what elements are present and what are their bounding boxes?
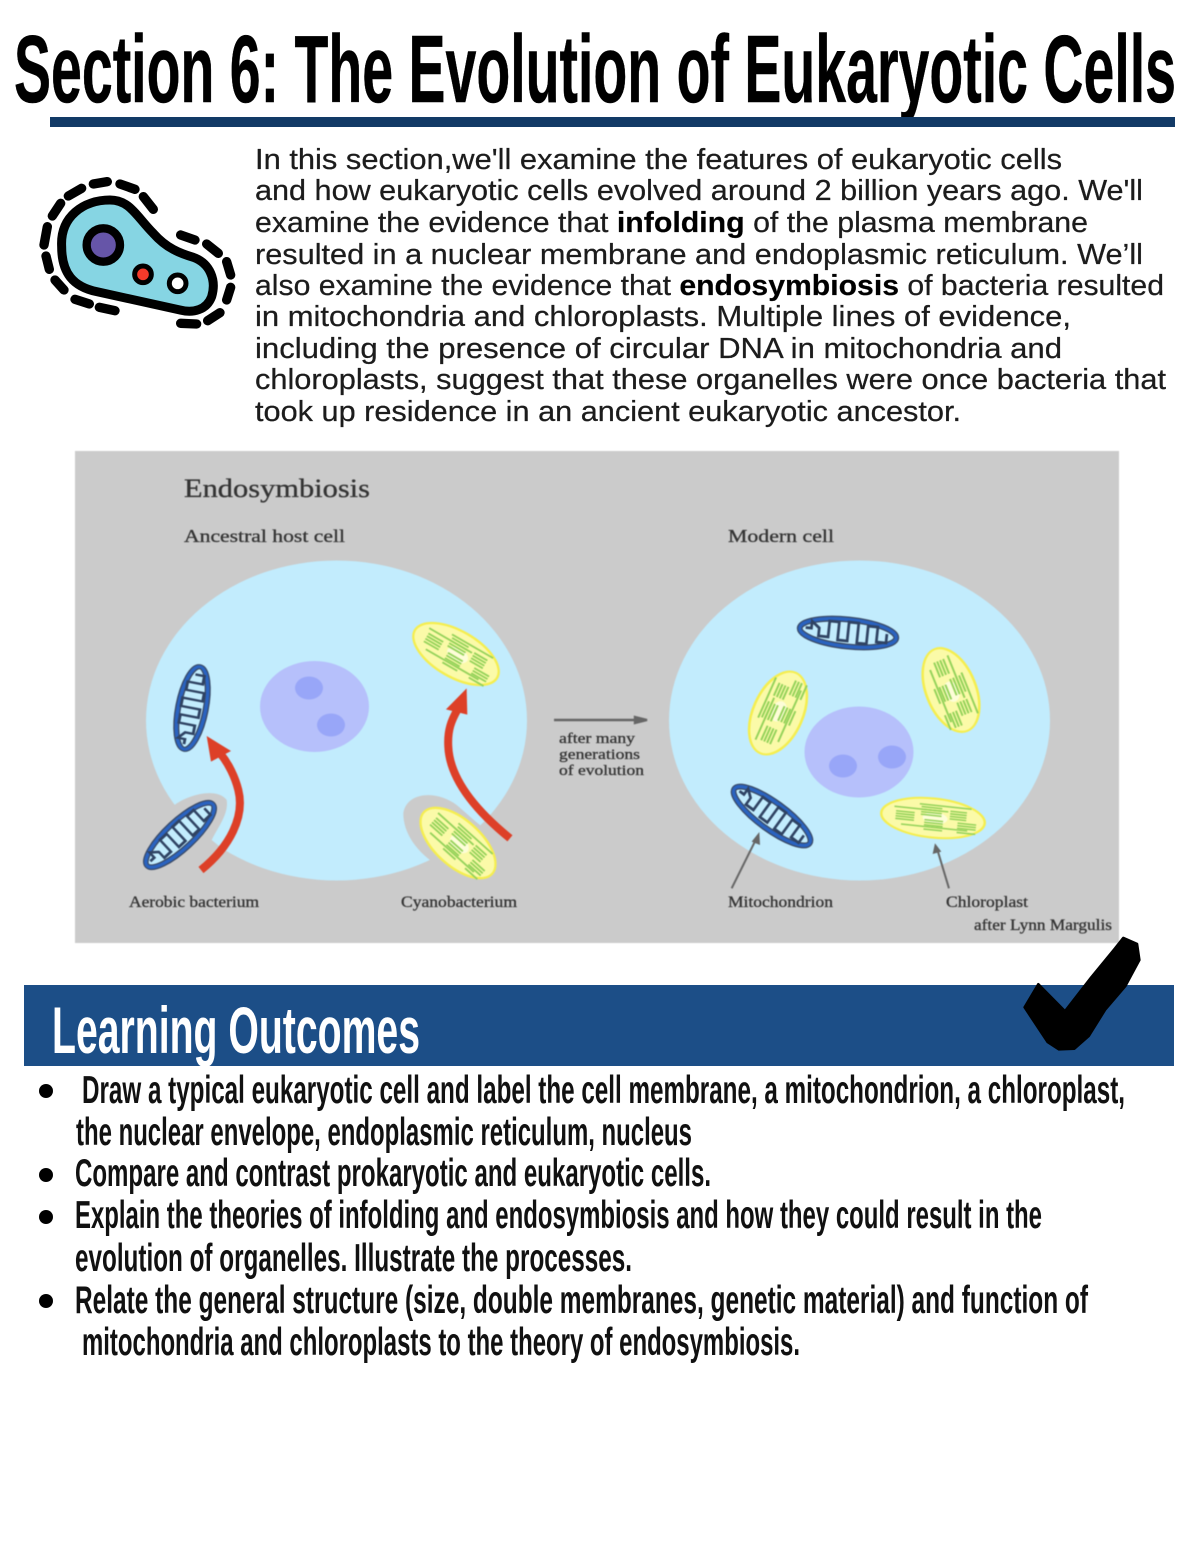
chloroplast left: [737, 663, 819, 763]
chloroplast right: [911, 640, 991, 740]
mitochondrion lower: [726, 778, 818, 854]
label: after many generations of evolution: after many: [559, 731, 636, 747]
mitochondrion inside host: [170, 664, 214, 752]
intro text block: resulted in a nuclear membrane and endoplasmic reticulum. We’ll: [255, 239, 1143, 271]
intro text block: in mitochondria and chloroplasts. Multiple lines of evidence,: [255, 301, 1071, 333]
icon: check mark: [1025, 938, 1139, 1049]
ancestral host cell: [138, 560, 527, 891]
nucleus: [260, 661, 369, 752]
aerobic bacterium: [138, 794, 222, 876]
bullet 3: [39, 1194, 1042, 1280]
label: cyanobacterium: Cyanobacterium: [401, 894, 517, 911]
learning outcomes banner: [24, 985, 1174, 1066]
arrow: after many generations: [554, 717, 647, 723]
intro text block: and how eukaryotic cells evolved around 2 billion years ago. We'll: [255, 175, 1143, 207]
label: mitochondrion: Mitochondrion: [728, 894, 833, 911]
bullet 2: [39, 1152, 711, 1195]
label: aerobic bacterium: Aerobic bacterium: [129, 894, 259, 911]
intro text block: chloroplasts, suggest that these organelles were once bacteria that: [255, 364, 1166, 396]
learning outcomes list: [39, 1069, 1125, 1364]
nucleus: [804, 706, 914, 798]
red arrow: cyanobacterium engulfed: [446, 688, 510, 838]
modern cell: [669, 560, 1050, 880]
intro text block: [255, 144, 1166, 428]
label: after many generations of evolution: of evolution: [559, 763, 645, 779]
label: chloroplast: Chloroplast: [946, 894, 1029, 911]
intro text block: took up residence in an ancient eukaryotic ancestor.: [255, 396, 961, 428]
credit: after Lynn Margulis: [974, 917, 1112, 934]
bullet 3: evolution of organelles. Illustrate the processes.: [75, 1237, 632, 1280]
label: after many generations of evolution: generations: [559, 747, 640, 763]
mitochondrion top: [798, 615, 898, 651]
bullet 1: [39, 1069, 1125, 1154]
red arrow: bacterium engulfed: [201, 736, 240, 870]
chloroplast bottom: [879, 793, 987, 843]
bullet 4: [39, 1279, 1089, 1364]
cyanobacterium: [408, 795, 508, 891]
bullet 2: Compare and contrast prokaryotic and eukaryotic cells.: [75, 1152, 711, 1195]
intro text block: also examine the evidence that endosymbiosis of bacteria resulted: [255, 270, 1164, 302]
intro text block: examine the evidence that infolding of the plasma membrane: [255, 207, 1088, 239]
label: modern cell: Modern cell: [728, 526, 834, 546]
intro text block: including the presence of circular DNA in mitochondria and: [255, 333, 1062, 365]
label: ancestral host cell: Ancestral host cell: [184, 526, 345, 546]
chloroplast inside host: [403, 610, 509, 698]
diagram heading: Endosymbiosis: [184, 474, 370, 503]
bullet 1: the nuclear envelope, endoplasmic reticulum, nucleus: [76, 1111, 692, 1154]
learning outcomes heading: Learning Outcomes: [52, 993, 420, 1067]
intro text block: In this section,we'll examine the features of eukaryotic cells: [255, 144, 1062, 176]
arrow: chloroplast pointer: [933, 843, 949, 888]
icon: bacterium cell: [44, 182, 231, 324]
arrow: mitochondrion pointer: [732, 832, 760, 888]
membrane pockets: [173, 793, 500, 883]
title underline rule: [50, 117, 1175, 127]
label: after many generations of evolution: [559, 731, 645, 779]
panel: endosymbiosis diagram: [75, 451, 1119, 943]
